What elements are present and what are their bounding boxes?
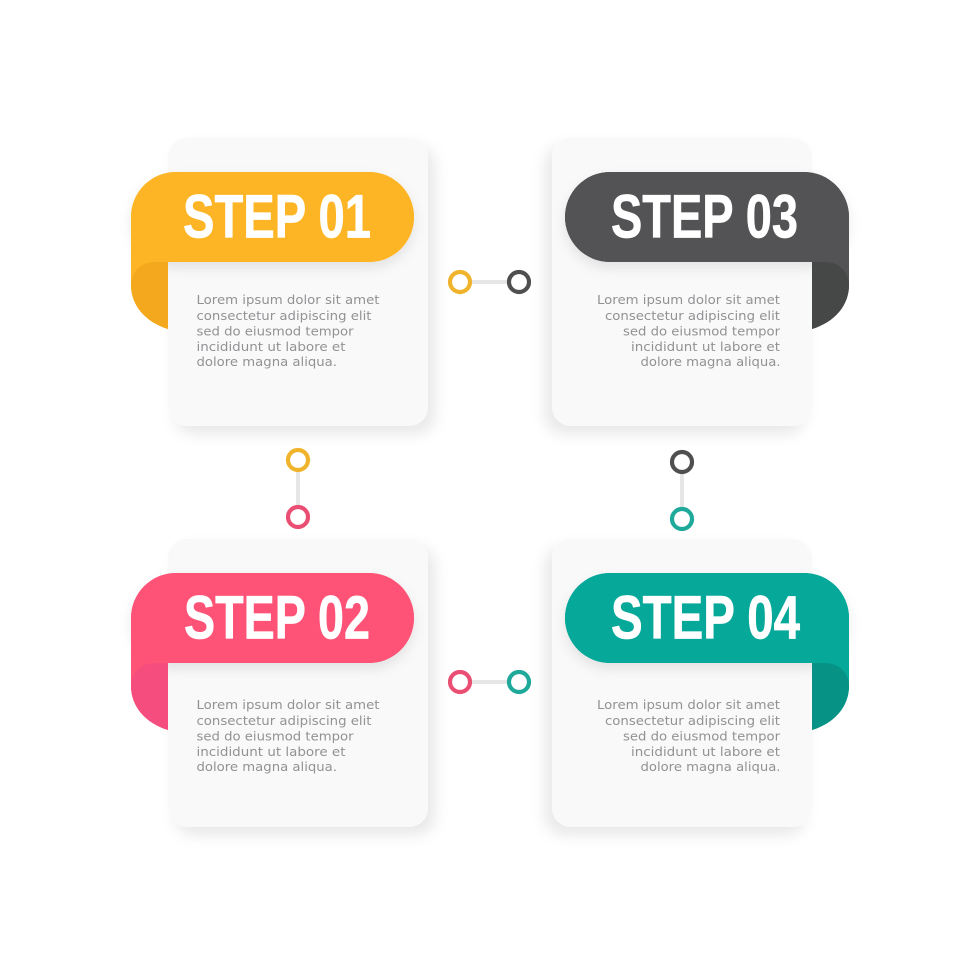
body text: consectetur adipiscing elit [605,308,780,323]
connector: step 01 to step 02 [288,450,308,527]
body text: Lorem ipsum dolor sit amet [196,697,380,712]
body text: dolore magna aliqua. [640,759,780,774]
body text: consectetur adipiscing elit [196,713,372,728]
connector: step 03 to step 04 [672,452,692,529]
body text: incididunt ut labore et [631,744,780,759]
card background [552,138,812,426]
body text: consectetur adipiscing elit [605,713,780,728]
ribbon: step 01 [131,172,414,329]
ribbon fold [812,262,849,329]
body text: sed do eiusmod tempor [196,324,354,338]
body text [196,697,380,774]
heading: step 03: STEP 03 [611,182,798,250]
card background [168,138,428,426]
heading: step 01: STEP 01 [183,182,371,250]
card background [552,539,812,827]
ribbon shadow band [565,573,849,663]
ribbon: step 04 [565,573,849,730]
ribbon: step 03 [565,172,849,329]
body text [196,292,380,369]
panel: step 01 [131,138,428,426]
body text: Lorem ipsum dolor sit amet [597,292,780,307]
panel: step 02 [131,539,428,827]
body text [597,697,781,774]
body text: sed do eiusmod tempor [623,324,781,338]
ribbon fold [131,262,168,329]
heading: step 02: STEP 02 [184,584,370,652]
ribbon shadow band [131,172,414,262]
body text: consectetur adipiscing elit [196,308,372,323]
body text: sed do eiusmod tempor [196,728,354,744]
panel: step 04 [552,539,849,827]
body text: Lorem ipsum dolor sit amet [597,697,780,712]
body text: incididunt ut labore et [631,339,780,354]
body text: incididunt ut labore et [196,744,346,759]
body text: sed do eiusmod tempor [623,728,781,744]
body text: dolore magna aliqua. [640,354,780,369]
body text [597,292,781,369]
ribbon fold [812,663,849,730]
connector: step 02 to step 04 [450,672,529,692]
panel: step 03 [552,138,849,426]
connector: step 01 to step 03 [450,272,529,292]
ribbon shadow band [565,172,849,262]
body text: Lorem ipsum dolor sit amet [196,292,380,307]
ribbon: step 02 [131,573,414,730]
body text: incididunt ut labore et [196,339,346,354]
card background [168,539,428,827]
ribbon shadow band [131,573,414,663]
ribbon fold [131,663,168,730]
body text: dolore magna aliqua. [196,354,337,369]
heading: step 04: STEP 04 [611,584,800,652]
body text: dolore magna aliqua. [196,759,337,774]
